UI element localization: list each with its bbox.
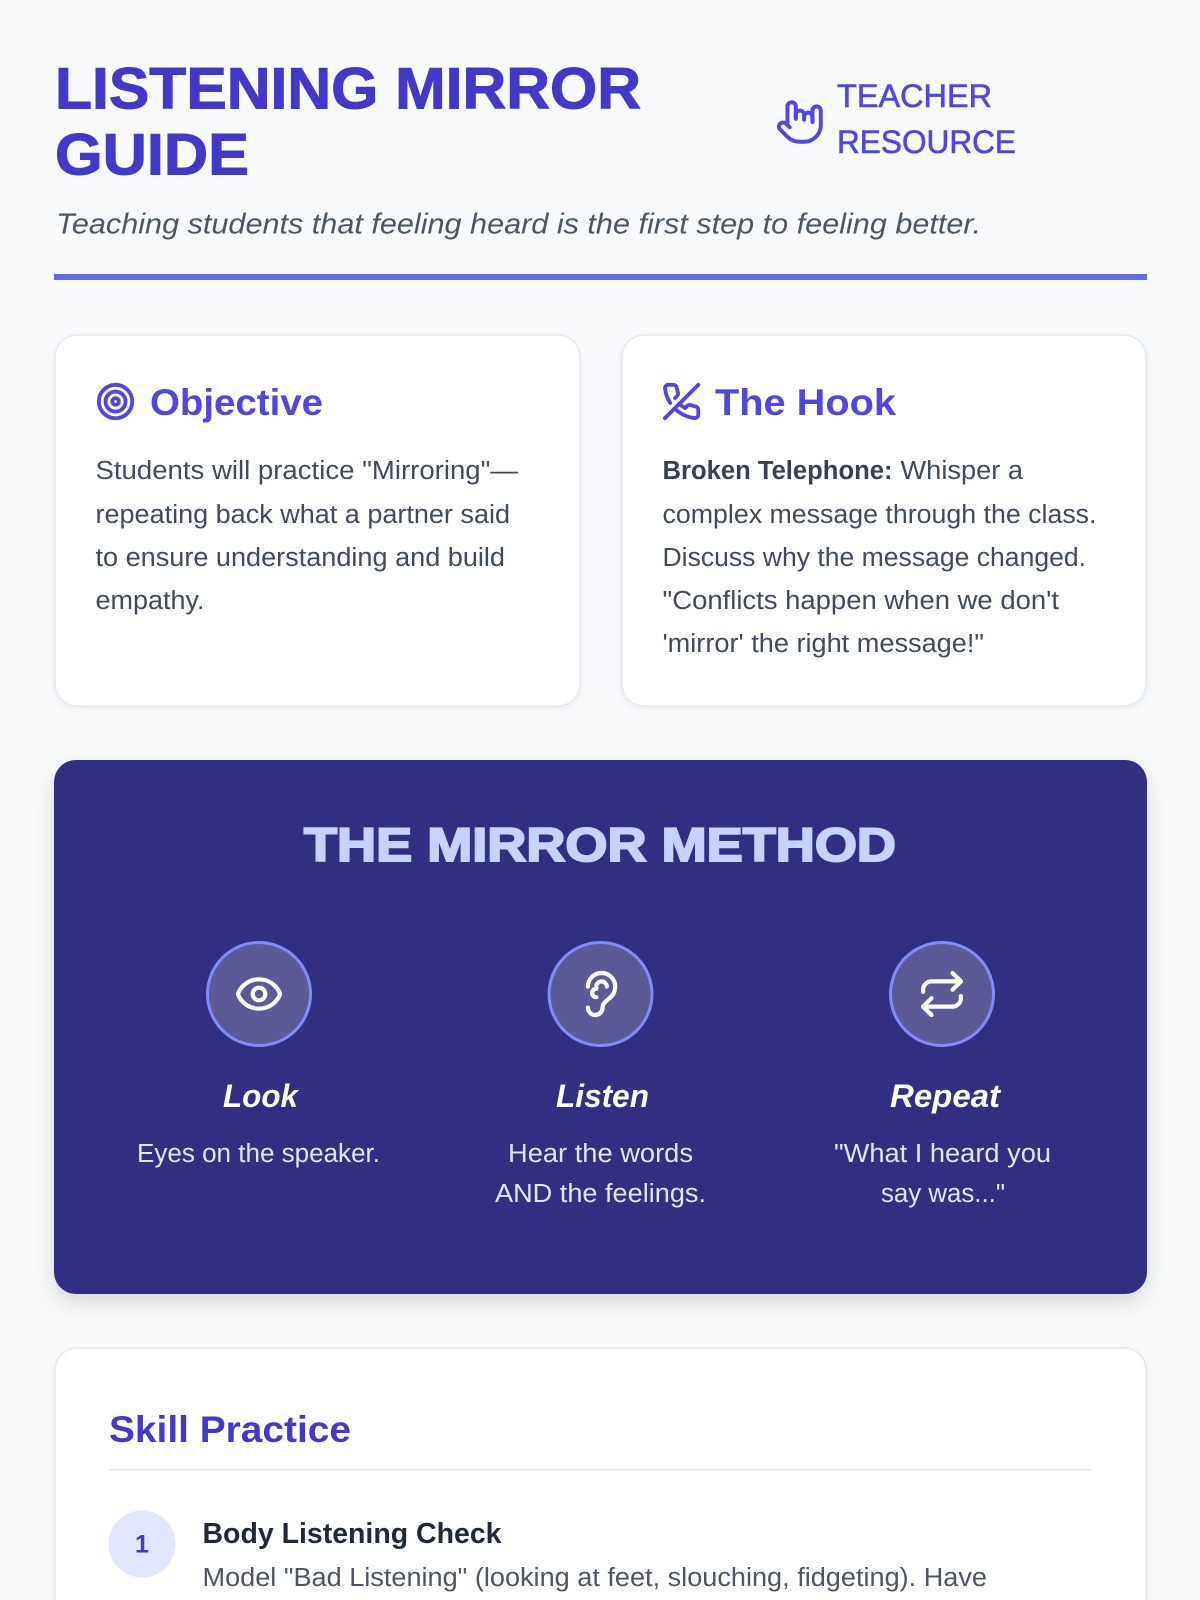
text: hook body: Discuss why the message changed. — [662, 544, 1086, 572]
icon: phone off — [665, 385, 698, 418]
panel: the mirror method — [54, 760, 1147, 1294]
panel: skill practice — [55, 1348, 1146, 1600]
text: objective body: empathy. — [96, 587, 204, 615]
step: repeat: Repeat — [890, 1078, 1001, 1114]
panel: objective — [55, 335, 580, 706]
header rule — [54, 274, 1147, 280]
title: LISTENING MIRROR — [55, 56, 641, 122]
tagline: Teaching students that feeling heard is the first step to feeling better. — [56, 208, 981, 240]
text: objective body: Students will practice "Mirroring"— — [96, 457, 519, 485]
badge: teacher resource — [837, 78, 1016, 160]
icon: ear — [549, 942, 652, 1046]
text: hook body — [662, 457, 1096, 658]
badge: teacher resource: RESOURCE — [837, 124, 1016, 160]
step number 1: 1 — [135, 1530, 149, 1558]
text: hook body: Broken Telephone: — [662, 457, 892, 485]
title — [55, 56, 641, 188]
step: look — [137, 942, 380, 1168]
title: GUIDE — [55, 122, 249, 188]
icon: target — [99, 385, 132, 418]
step number 1 — [108, 1510, 176, 1578]
text: hook body: Whisper a — [900, 457, 1024, 485]
step: repeat: say was..." — [881, 1180, 1005, 1208]
heading: objective: Objective — [150, 382, 323, 423]
icon: eye — [208, 942, 310, 1046]
step: repeat — [834, 942, 1051, 1208]
text: hook body: "Conflicts happen when we don't — [662, 587, 1059, 615]
text: hook body: complex message through the class. — [662, 501, 1096, 529]
text: objective body: to ensure understanding and build — [96, 544, 505, 572]
panel: the hook — [622, 335, 1146, 706]
step heading: Body Listening Check — [202, 1518, 502, 1550]
heading: the mirror method: THE MIRROR METHOD — [304, 818, 896, 871]
step: look: Look — [223, 1078, 300, 1114]
step: look: Eyes on the speaker. — [137, 1140, 380, 1168]
badge: teacher resource: TEACHER — [837, 78, 992, 114]
step: listen — [495, 942, 706, 1208]
step description: Model "Bad Listening" (looking at feet, slouching, fidgeting). Have — [202, 1564, 987, 1592]
icon: hand — [779, 102, 821, 142]
step: listen: Hear the words — [508, 1140, 693, 1168]
text: objective body: repeating back what a partner said — [96, 501, 510, 529]
step: repeat: "What I heard you — [834, 1140, 1051, 1168]
text: objective body — [96, 457, 519, 615]
icon: repeat arrows — [890, 942, 994, 1046]
step: listen: AND the feelings. — [495, 1180, 706, 1208]
heading: the hook: The Hook — [715, 382, 896, 423]
heading: skill practice: Skill Practice — [109, 1409, 351, 1450]
text: hook body: 'mirror' the right message!" — [662, 630, 984, 658]
step: listen: Listen — [556, 1078, 649, 1114]
